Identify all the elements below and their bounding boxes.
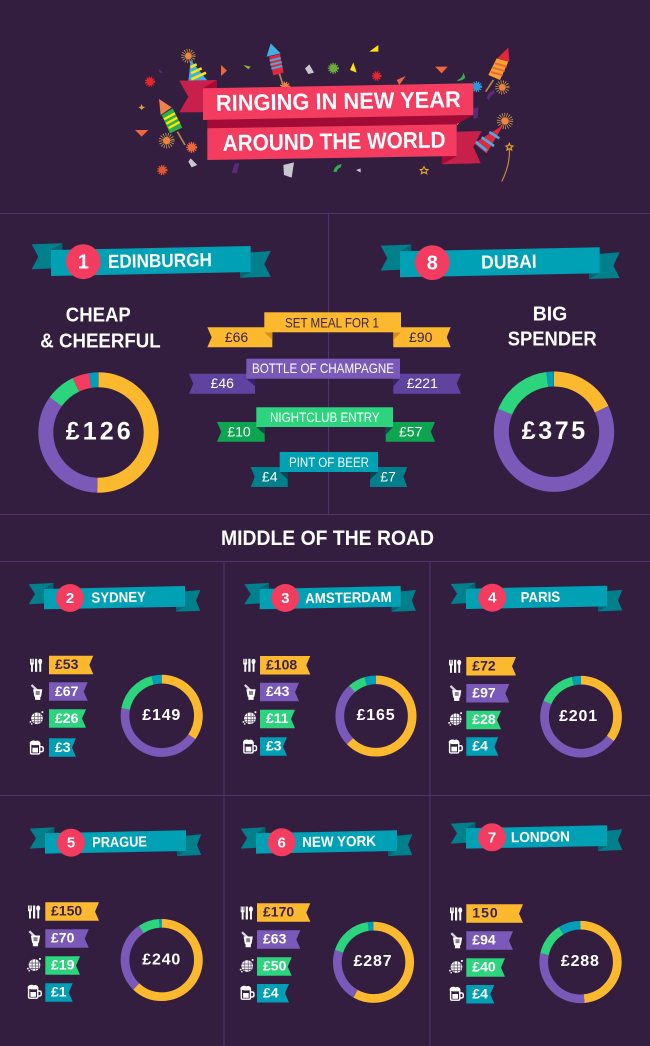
fireworks and confetti decoration [135, 43, 513, 182]
donut chart: London [544, 925, 617, 999]
comparison: set meal for 1: £90 [409, 329, 433, 345]
ribbon: New York: NEW YORK [302, 834, 377, 851]
price tags: Sydney [49, 656, 93, 757]
title banner with fireworks [135, 43, 513, 182]
ribbon: New York [241, 827, 412, 856]
panel: Paris [448, 583, 622, 756]
heading: big spender: SPENDER [508, 329, 597, 351]
donut chart: Sydney [125, 679, 198, 752]
price tags: Paris: £28 [472, 711, 496, 727]
ribbon: Sydney [29, 583, 200, 612]
price tags: New York: £63 [263, 931, 287, 947]
panel: London [449, 822, 622, 1004]
comparison: set meal for 1: SET MEAL FOR 1 [285, 314, 379, 330]
ribbon: London [451, 822, 622, 851]
comparison: set meal for 1 [207, 312, 451, 347]
icons: New York [240, 906, 254, 999]
price tags: Amsterdam: £11 [266, 710, 289, 726]
banner band: bottom [207, 124, 457, 160]
price tags: Prague [45, 902, 99, 1002]
heading: big spender: BIG [533, 304, 567, 326]
ribbon: Edinburgh: EDINBURGH [108, 250, 212, 273]
price tags: London [466, 904, 523, 1004]
ribbon: Prague [30, 827, 201, 857]
total: Amsterdam: £165 [357, 707, 395, 724]
ribbon: Paris: PARIS [520, 590, 561, 606]
icons: London [449, 907, 463, 1000]
price tags: Paris [466, 657, 516, 756]
banner band: top [203, 83, 473, 120]
comparison: pint of beer: £4 [262, 469, 278, 485]
ribbon: Dubai [381, 245, 620, 280]
price tags: London: £94 [472, 932, 496, 948]
panel: Prague [27, 827, 201, 1002]
ribbon: Edinburgh: 1 [78, 252, 89, 274]
price tags: Sydney: £53 [55, 656, 79, 672]
title line 2: AROUND THE WORLD [222, 126, 446, 156]
price tags: Amsterdam [260, 656, 310, 756]
price tags: Sydney: £67 [55, 683, 79, 699]
ribbon: Dubai: 8 [427, 252, 438, 274]
price tags: Paris: £97 [472, 684, 496, 700]
price tags: New York: £50 [263, 958, 287, 974]
price tags: London: £4 [472, 985, 488, 1001]
comparison: pint of beer: £7 [380, 469, 396, 485]
total: Paris: £201 [559, 708, 598, 725]
donut chart: New York [337, 926, 410, 998]
total: New York: £287 [354, 953, 392, 970]
donut chart: Edinburgh total [46, 380, 151, 485]
ribbon: Sydney: 2 [66, 590, 74, 607]
ribbon: New York: 6 [278, 834, 286, 851]
icons: Prague [27, 905, 41, 998]
price tags: Prague: £70 [51, 930, 75, 946]
ribbon: Dubai: DUBAI [481, 252, 537, 274]
total: Prague: £240 [142, 951, 181, 968]
panel: Sydney [29, 583, 200, 757]
comparison: bottle of champagne [189, 359, 461, 394]
ribbon: Paris: 4 [488, 590, 497, 607]
price tags: London: £40 [472, 959, 496, 975]
ribbon: London: LONDON [511, 829, 570, 846]
ribbon: Paris [451, 583, 622, 612]
ribbon: Edinburgh [32, 243, 271, 279]
ribbon: Amsterdam: AMSTERDAM [305, 590, 392, 607]
comparison: nightclub entry: NIGHTCLUB ENTRY [270, 409, 380, 425]
price tags: Paris: £4 [472, 738, 488, 754]
total: Sydney: £149 [142, 707, 181, 724]
panel: Amsterdam [243, 583, 416, 756]
icons: Sydney [30, 659, 43, 754]
price tags: Sydney: £26 [55, 710, 79, 726]
comparison: bottle of champagne: BOTTLE OF CHAMPAGNE [252, 360, 394, 376]
title line 1: RINGING IN NEW YEAR [216, 86, 461, 116]
price tags: New York: £4 [263, 984, 279, 1000]
price tags: Amsterdam: £43 [266, 683, 290, 699]
comparison: pint of beer [251, 452, 407, 487]
price tags: Amsterdam: £108 [266, 656, 297, 672]
icons: Paris [448, 660, 462, 753]
donut chart: Dubai total [501, 379, 607, 484]
ribbon: Amsterdam [244, 583, 416, 612]
price tags: Amsterdam: £3 [266, 738, 282, 754]
ribbon: Sydney: SYDNEY [91, 590, 146, 607]
heading: cheap and cheerful [40, 305, 161, 353]
price tags: Prague: £1 [51, 984, 67, 1000]
heading: cheap and cheerful: & CHEERFUL [40, 331, 161, 353]
ribbon: Prague: 5 [67, 835, 75, 852]
donut chart: Prague [125, 923, 198, 997]
ribbon: Prague: PRAGUE [92, 834, 147, 851]
total: London: £288 [561, 953, 600, 970]
price tags: Paris: £72 [472, 657, 496, 673]
ribbon: Amsterdam: 3 [281, 590, 289, 607]
price tags: New York: £170 [263, 904, 294, 920]
ribbon: London: 7 [488, 829, 496, 846]
comparison: bottle of champagne: £46 [211, 375, 234, 391]
price tags: Prague: £19 [51, 957, 75, 973]
price tags: Prague: £150 [51, 903, 82, 919]
price tags: London: 150 [472, 905, 499, 921]
comparison: pint of beer: PINT OF BEER [289, 454, 369, 470]
price tags: New York [257, 903, 310, 1002]
heading: cheap and cheerful: CHEAP [66, 305, 131, 327]
comparison: set meal for 1: £66 [225, 329, 248, 345]
donut chart: Paris [544, 680, 618, 753]
panel: New York [240, 827, 412, 1002]
comparison: bottle of champagne: £221 [407, 375, 438, 391]
banner tails [179, 80, 482, 164]
comparison: nightclub entry [217, 407, 435, 442]
heading: big spender [508, 304, 597, 351]
comparison: nightclub entry: £57 [399, 424, 423, 440]
total: £126: £126 [66, 417, 131, 445]
comparison: nightclub entry: £10 [227, 424, 251, 440]
donut chart: Amsterdam [340, 680, 412, 752]
icons: Amsterdam [243, 659, 256, 753]
price tags: Sydney: £3 [55, 739, 71, 755]
total: £375: £375 [522, 417, 585, 445]
section heading: middle of the road: MIDDLE OF THE ROAD [221, 527, 434, 550]
